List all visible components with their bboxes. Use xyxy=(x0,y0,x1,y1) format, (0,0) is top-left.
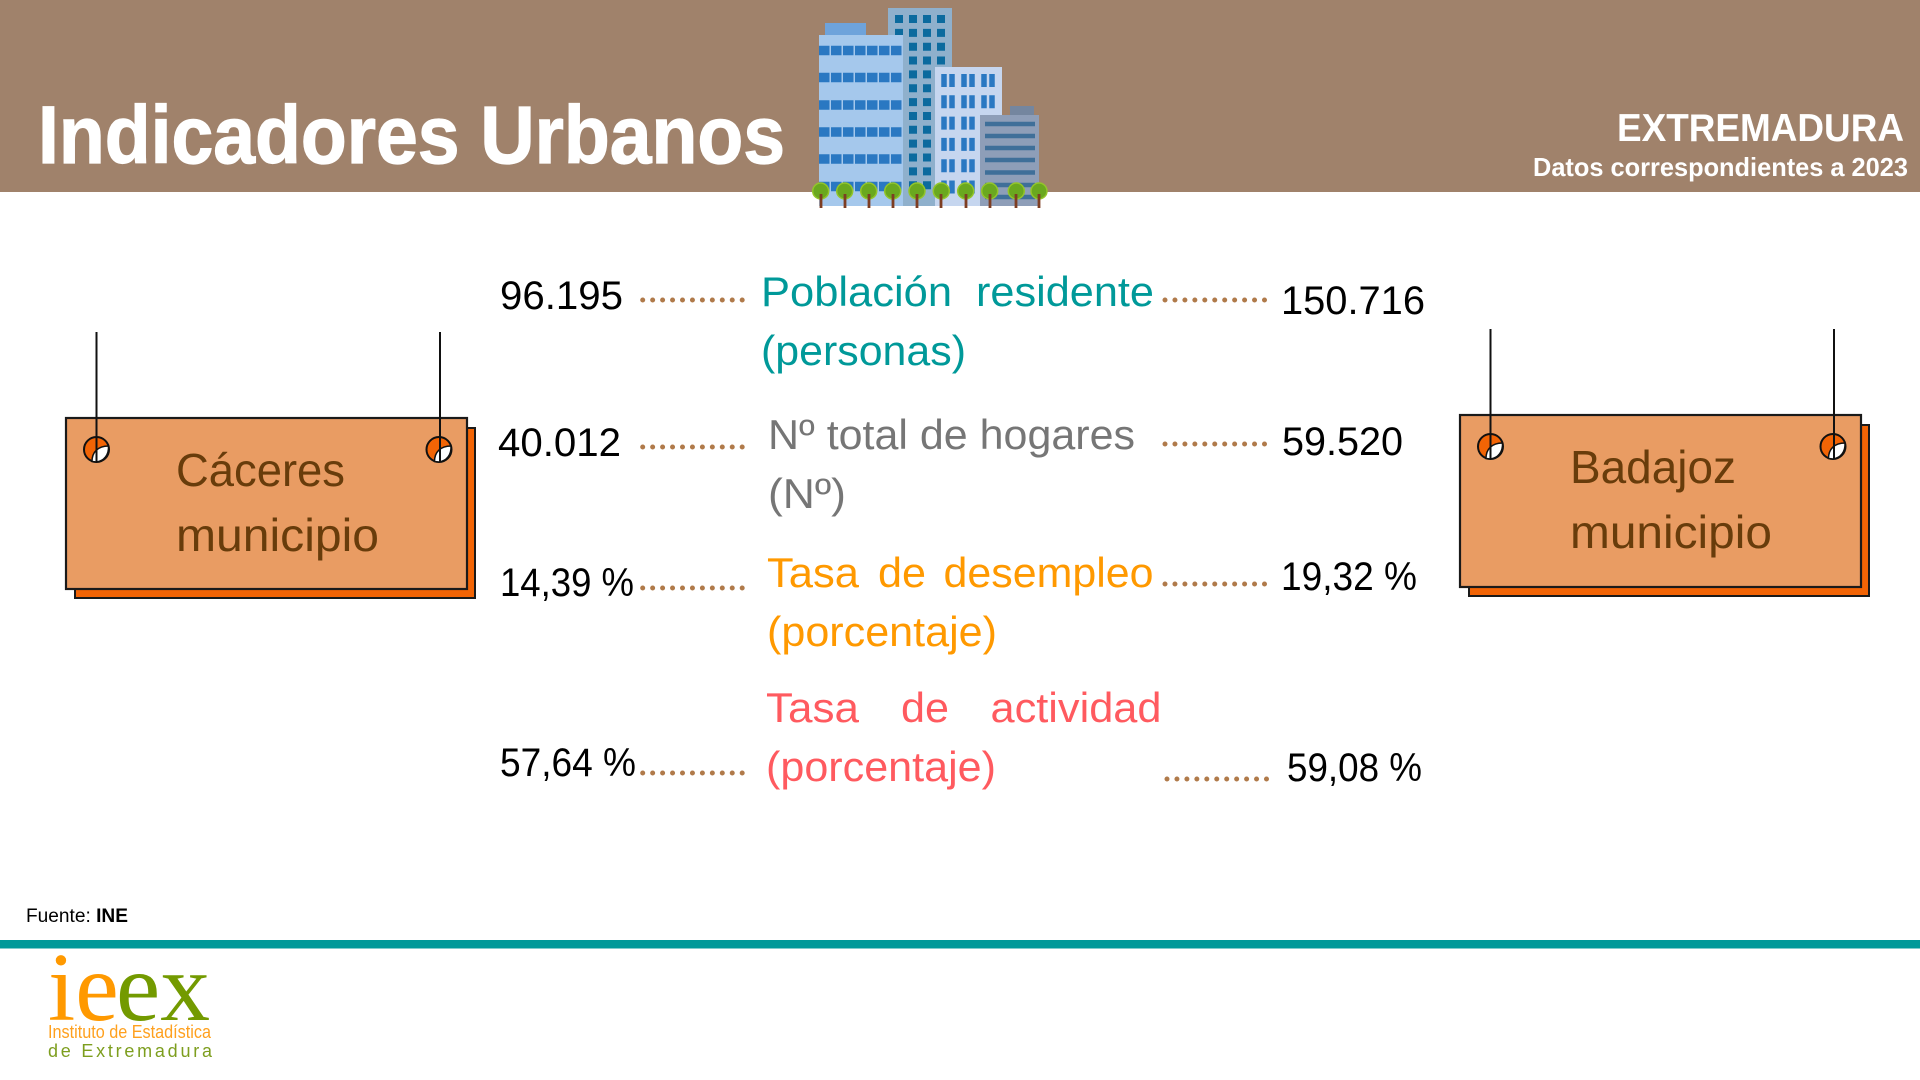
header band xyxy=(0,0,1920,192)
indicator label: Tasa xyxy=(767,549,860,596)
indicator label: actividad xyxy=(990,684,1162,731)
sign text: Cáceres xyxy=(176,444,345,496)
indicator label: Tasa xyxy=(766,684,860,731)
value: Badajoz population: 150.716 xyxy=(1281,279,1425,323)
sign text xyxy=(1570,441,1772,558)
year subtitle: Datos correspondientes a 2023 xyxy=(1533,152,1908,182)
indicator label xyxy=(766,684,1162,790)
indicator label xyxy=(767,549,1154,655)
icon: right hook xyxy=(426,332,452,462)
row: Nº total de hogares xyxy=(498,411,1403,517)
logo: ieex: de Extremadura xyxy=(48,1041,213,1061)
logo: ieex: Instituto de Estadística xyxy=(48,1022,212,1042)
icon: city buildings xyxy=(813,8,1047,208)
logo: ieex: ie xyxy=(48,934,119,1042)
sign text: Badajoz xyxy=(1570,441,1736,493)
indicator label: (porcentaje) xyxy=(767,608,997,655)
indicator label: desempleo xyxy=(944,549,1154,596)
value: Badajoz unemployment: 19,32 % xyxy=(1281,555,1417,599)
panel: Badajoz sign xyxy=(1460,329,1869,596)
building: grey low-rise xyxy=(980,106,1039,206)
row: Tasa de actividad xyxy=(500,684,1422,790)
region label: EXTREMADURA xyxy=(1617,107,1904,150)
icon: left hook xyxy=(1478,329,1503,459)
row: Población residente xyxy=(500,268,1425,374)
value: Cáceres population: 96.195 xyxy=(500,274,623,318)
building: pale with paired windows xyxy=(935,67,1002,206)
sign text: municipio xyxy=(1570,506,1772,558)
sign text: municipio xyxy=(176,509,379,561)
indicator label: de xyxy=(901,684,949,731)
indicator label: Población xyxy=(761,268,952,315)
panel: Cáceres sign xyxy=(66,332,475,598)
row: Tasa de desempleo xyxy=(500,549,1417,655)
source note: Fuente: INE xyxy=(26,906,128,927)
indicator label: (personas) xyxy=(761,327,966,374)
indicator label xyxy=(768,411,1135,517)
sign text xyxy=(176,444,379,561)
indicator label: de xyxy=(878,549,926,596)
building: wide light blue xyxy=(819,23,903,206)
row of trees xyxy=(813,183,1047,208)
value: Cáceres activity: 57,64 % xyxy=(500,741,636,785)
logo: ieex: ex xyxy=(116,934,210,1042)
value: Badajoz households: 59.520 xyxy=(1282,420,1403,464)
indicator label: (Nº) xyxy=(768,470,846,517)
indicator label xyxy=(761,268,1154,374)
building: tall teal xyxy=(888,8,952,206)
logo: ieex xyxy=(48,934,213,1061)
icon: left hook xyxy=(84,332,109,462)
indicator label: Nº total de hogares xyxy=(768,411,1135,458)
icon: right hook xyxy=(1820,329,1846,459)
title: Indicadores Urbanos xyxy=(38,90,785,181)
value: Cáceres unemployment: 14,39 % xyxy=(500,561,634,605)
value: Badajoz activity: 59,08 % xyxy=(1287,746,1422,790)
value: Cáceres households: 40.012 xyxy=(498,421,621,465)
indicator label: (porcentaje) xyxy=(766,743,996,790)
indicator label: residente xyxy=(976,268,1154,315)
